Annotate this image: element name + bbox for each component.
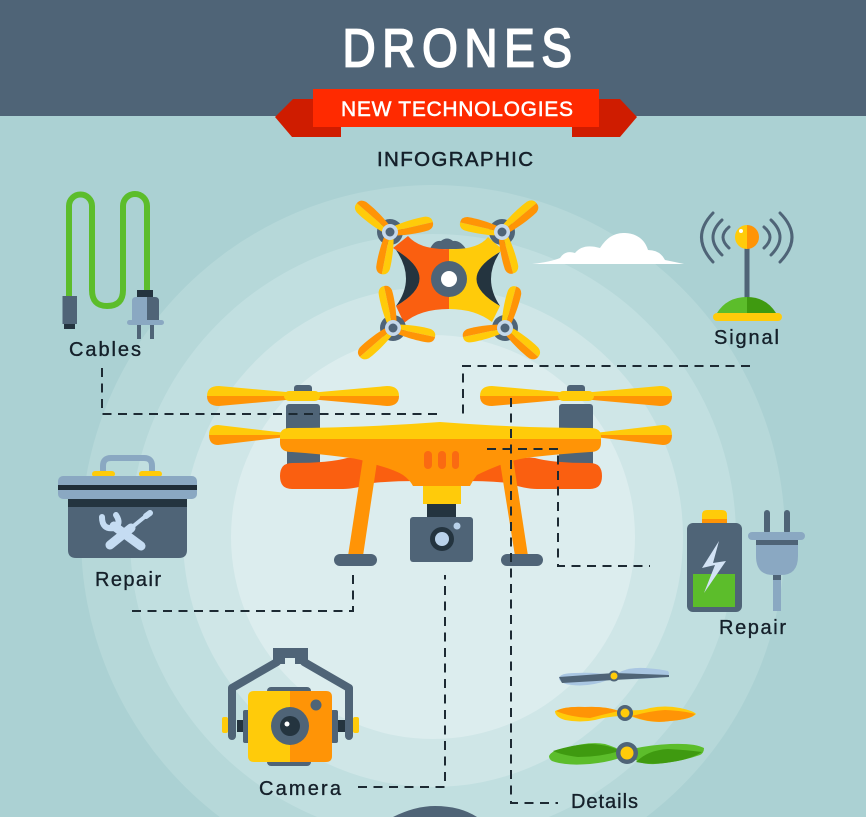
header band [0, 0, 866, 116]
camera mount [423, 486, 461, 517]
right motor [559, 385, 593, 466]
label: signal: Signal [714, 327, 779, 349]
label: camera: Camera [259, 778, 342, 800]
label: details: Details [571, 791, 638, 813]
drone body [280, 438, 601, 486]
dashed connector lines [102, 366, 750, 803]
left motor [286, 385, 320, 466]
blue propeller [559, 668, 669, 685]
partial shape at bottom edge [393, 806, 477, 817]
title: DRONES [343, 18, 572, 78]
icon: gimbal camera [222, 648, 359, 766]
label: repair left: Repair [95, 569, 161, 591]
icon: toolbox [58, 458, 197, 558]
large drone side view [207, 385, 672, 566]
label: cables: Cables [69, 339, 141, 361]
landing feet [334, 554, 543, 566]
landing legs [348, 458, 528, 556]
icon: battery [687, 510, 742, 612]
icon: cloud [532, 233, 684, 264]
label: repair right: Repair [719, 617, 786, 639]
ribbon banner [275, 89, 637, 137]
orange propeller [555, 705, 696, 722]
side propellers [209, 425, 672, 445]
icon: spare propellers [549, 668, 704, 765]
icon: signal antenna [702, 213, 792, 321]
top propellers [207, 386, 672, 406]
small quadcopter top view [352, 197, 543, 362]
lower arms [280, 458, 420, 489]
green propeller [549, 742, 704, 765]
icon: wrench and screwdriver [102, 513, 150, 546]
icon: cables [62, 194, 164, 339]
vents [424, 451, 459, 469]
ribbon text: NEW TECHNOLOGIES [341, 98, 573, 121]
drone camera [410, 517, 473, 562]
subtitle: INFOGRAPHIC [377, 148, 533, 171]
icon: power plug [748, 510, 805, 611]
